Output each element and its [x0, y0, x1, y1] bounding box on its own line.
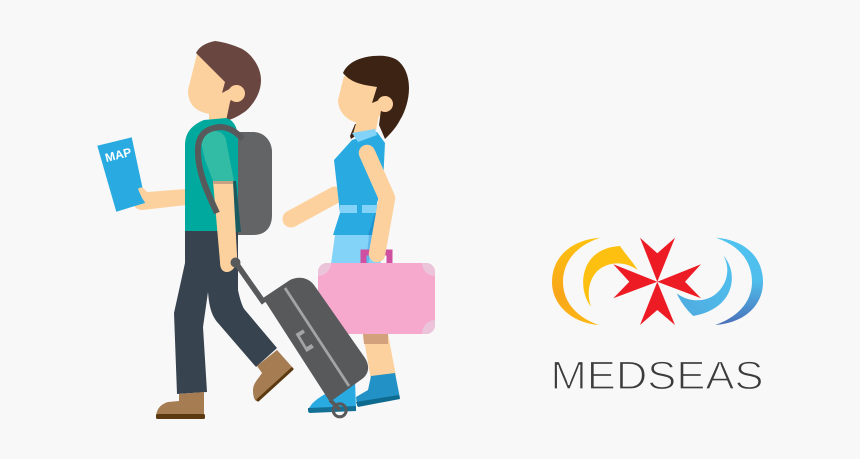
woman's far shoe — [308, 380, 356, 413]
figure: man — [97, 41, 293, 419]
icon: map — [97, 137, 146, 212]
woman's skirt fold — [366, 235, 377, 264]
icon: map: MAP — [104, 145, 133, 165]
woman's hair — [343, 56, 409, 139]
woman's skirt — [331, 235, 381, 264]
woman's ear — [377, 96, 393, 112]
woman's far arm — [291, 195, 335, 219]
suitcase wheel — [330, 400, 346, 417]
man's ear — [228, 85, 245, 102]
logo: blue outer crescent — [715, 238, 763, 325]
woman's knee shadow — [363, 334, 388, 344]
man's sleeve cuff — [213, 181, 233, 184]
man's face — [188, 54, 231, 114]
woman's neck — [353, 110, 380, 134]
man's front boot — [156, 392, 205, 419]
woman's near arm — [367, 153, 387, 254]
woman's boot — [356, 373, 400, 407]
woman's belt — [340, 205, 378, 213]
suitcase pull handle — [230, 258, 264, 303]
man's trousers — [174, 230, 277, 394]
case handle — [364, 252, 390, 264]
man's thumb — [138, 188, 150, 204]
logo: red Maltese cross — [613, 238, 701, 325]
man's arm — [213, 181, 237, 272]
woman's leg — [363, 334, 396, 380]
logo: yellow outer crescent — [552, 238, 600, 325]
woman's collar — [352, 129, 377, 142]
pink suitcase — [318, 263, 435, 334]
woman's back hair — [350, 124, 359, 139]
woman's top shadow — [368, 190, 385, 235]
man's sleeve — [201, 131, 234, 181]
man's far arm — [134, 189, 186, 210]
logo: blue inner crescent — [677, 256, 732, 316]
man's torso — [185, 118, 238, 231]
logo: yellow inner crescent — [583, 246, 638, 307]
icon: backpack — [238, 132, 272, 235]
backpack strap — [198, 127, 243, 213]
suitcase stripe — [285, 288, 349, 386]
grey rolling suitcase — [230, 258, 368, 417]
woman's top — [333, 132, 385, 235]
man's back boot — [253, 350, 293, 401]
suitcase latch — [296, 330, 314, 352]
logo wordmark: MEDSEAS — [550, 354, 764, 398]
woman's face — [338, 76, 384, 123]
figure: woman — [291, 56, 409, 413]
man's arm shadow — [232, 181, 241, 232]
suitcase body — [263, 278, 368, 402]
logo: MEDSEAS — [550, 238, 764, 398]
man's neck — [209, 108, 229, 125]
man's hair — [196, 41, 261, 121]
